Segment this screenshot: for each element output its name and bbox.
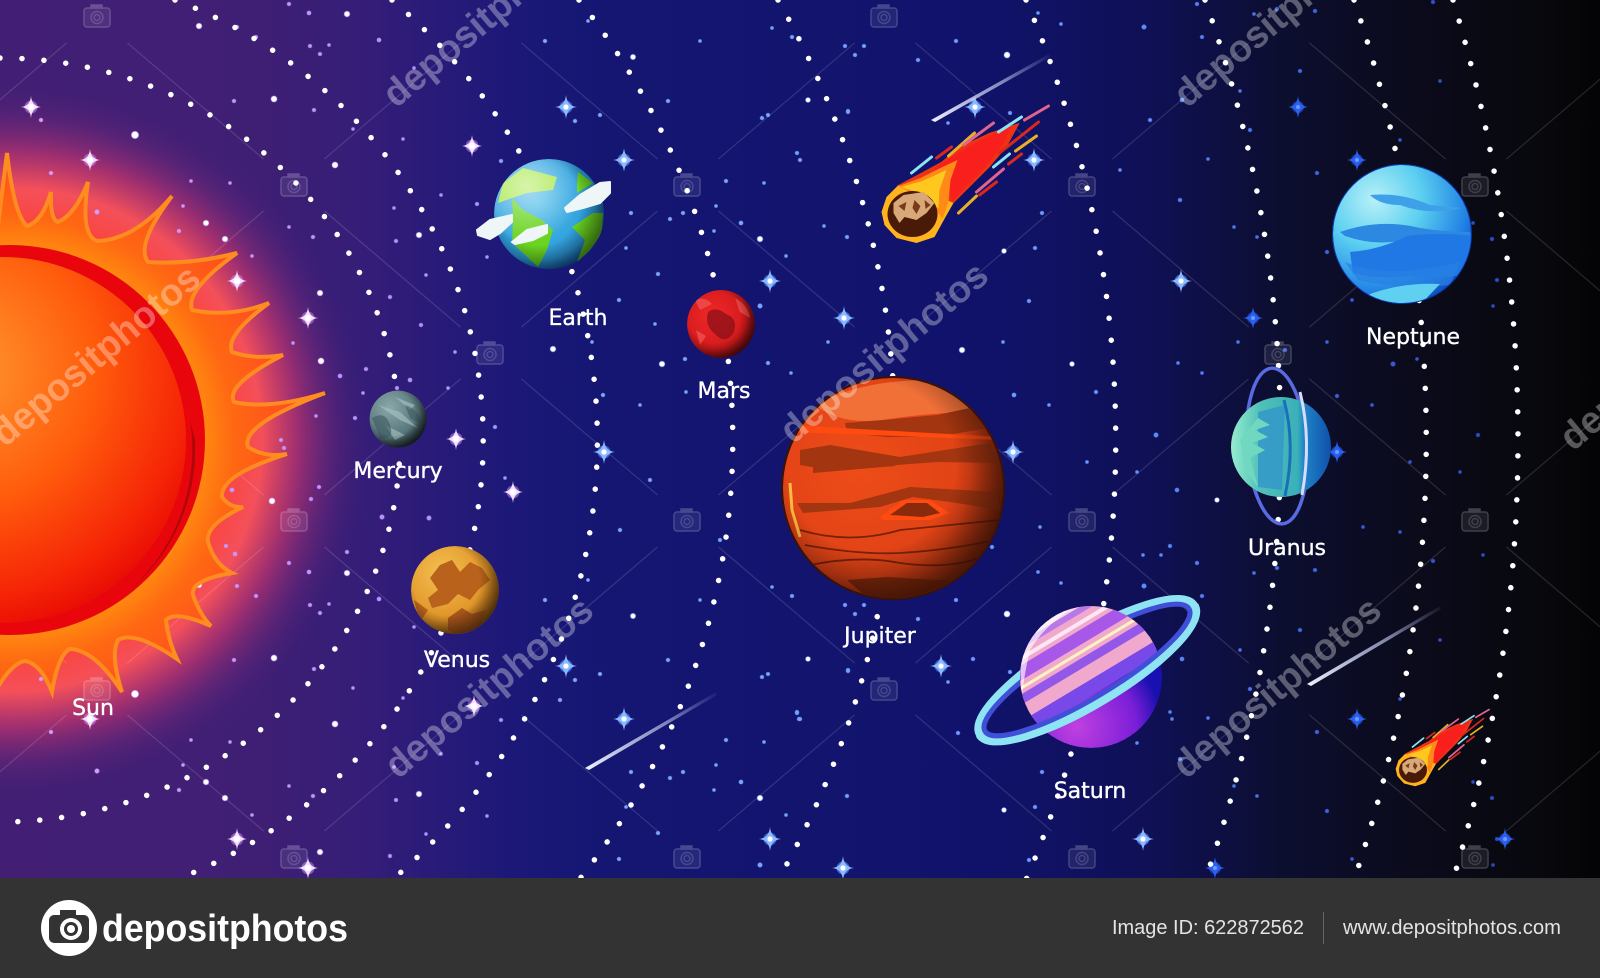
uranus globe xyxy=(1229,395,1333,499)
footer url: www.depositphotos.com xyxy=(1342,917,1561,939)
sun xyxy=(0,153,325,692)
saturn front ring xyxy=(976,603,1200,746)
label: Mars: Mars xyxy=(698,379,750,404)
watermark text: depositphotos xyxy=(377,589,602,787)
shooting star middle xyxy=(585,692,717,770)
comet small xyxy=(1396,710,1489,786)
label: Jupiter: Jupiter xyxy=(842,624,917,649)
saturn globe xyxy=(1020,606,1162,748)
comet large xyxy=(882,106,1048,243)
planet: Uranus xyxy=(1229,366,1333,526)
planet: Neptune xyxy=(1332,164,1475,305)
watermark text: depositphotos xyxy=(1165,589,1390,787)
uranus front ring arc xyxy=(1300,392,1307,495)
planet: Jupiter xyxy=(781,376,1005,600)
label: Mercury: Mercury xyxy=(353,459,443,484)
saturn back ring xyxy=(964,578,1210,762)
label: Venus: Venus xyxy=(424,648,490,673)
footer logo icon xyxy=(41,900,97,956)
footer image id: Image ID: 622872562 xyxy=(1112,917,1304,939)
planet: Earth xyxy=(477,159,610,269)
sun corona with flames xyxy=(0,153,325,692)
planet: Mercury xyxy=(370,390,426,448)
sun disc body xyxy=(0,257,186,623)
label: Earth: Earth xyxy=(548,306,608,331)
shooting star right xyxy=(1307,606,1441,686)
label: Uranus: Uranus xyxy=(1248,536,1326,561)
footer divider xyxy=(1323,912,1324,944)
footer bar xyxy=(0,878,1600,978)
shooting star top xyxy=(931,54,1050,122)
uranus back ring xyxy=(1242,366,1312,526)
earth clouds xyxy=(477,182,610,244)
label: Sun: Sun xyxy=(72,696,114,721)
planet: Venus xyxy=(411,546,499,638)
watermark text: depositphotos xyxy=(772,254,997,452)
planet: Saturn xyxy=(974,595,1200,748)
label: Saturn: Saturn xyxy=(1054,779,1126,804)
footer logo wordmark: depositphotos xyxy=(102,908,348,950)
sun glow xyxy=(0,80,370,800)
watermark cameras xyxy=(84,5,1488,868)
sun disc crescent shadow xyxy=(130,420,195,590)
sun disc rim xyxy=(0,245,205,635)
planet: Mars xyxy=(687,290,755,358)
label: Neptune: Neptune xyxy=(1366,325,1460,350)
